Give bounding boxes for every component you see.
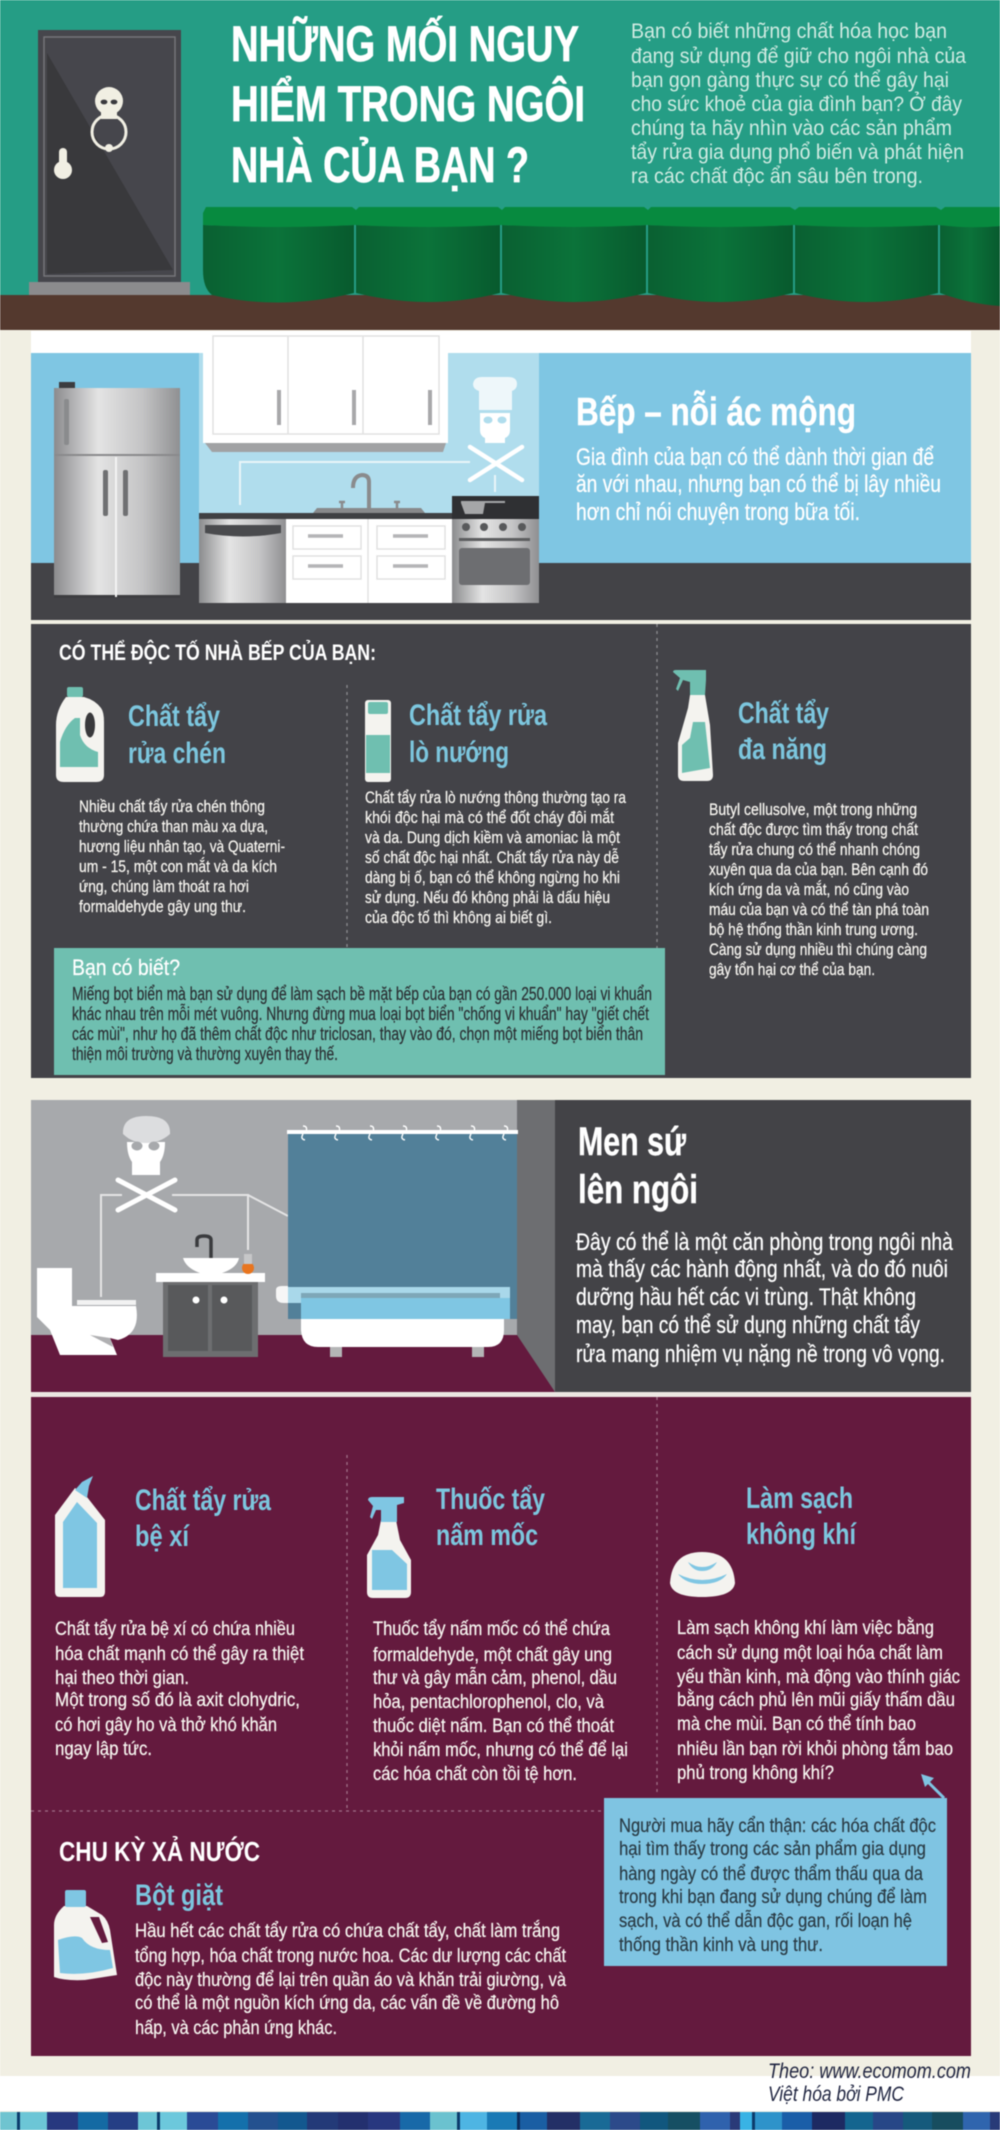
intro text xyxy=(631,20,966,188)
text: bathroom intro: may, bạn có thể sử dụng những chất tẩy xyxy=(576,1312,920,1339)
all-purpose title: Chất tẩy xyxy=(738,697,829,730)
icon: fridge xyxy=(54,382,180,598)
text: air freshener xyxy=(677,1617,960,1784)
callout: did you know: khác nhau trên mỗi mét vuông. Nhưng đừng mua loại bọt biển "chống vi khuẩn" hay "giết chết xyxy=(72,1003,649,1024)
toilet cleaner title xyxy=(135,1484,271,1553)
text: all-purpose: bộ hệ thống thần kinh trung ương. xyxy=(709,920,918,939)
text: mold spray: các hóa chất còn tồi tệ hơn. xyxy=(373,1764,577,1785)
credits: Theo: www.ecomom.com xyxy=(768,2060,971,2083)
callout: did you know xyxy=(54,948,665,1075)
text: dish soap: formaldehyde gây ung thư. xyxy=(79,897,246,916)
icon: air freshener xyxy=(670,1552,735,1597)
text: toilet cleaner: hóa chất mạnh có thể gây ra thiệt xyxy=(55,1644,305,1665)
text: air freshener: yếu thần kinh, mà động vào thính giác xyxy=(677,1667,960,1688)
text: oven cleaner: dàng bị ố, bạn có thể không ngừng ho khi xyxy=(365,868,620,887)
text: all-purpose: xuyên qua da của bạn. Bên cạnh đó xyxy=(709,860,928,879)
text: dish soap xyxy=(79,797,285,916)
text: oven cleaner: của độc tố thì không ai biết gì. xyxy=(365,908,552,927)
callout: buyer beware: trong khi bạn đang sử dụng chúng để làm xyxy=(619,1887,927,1908)
text: all-purpose: Butyl cellusolve, một trong những xyxy=(709,800,917,819)
text: air freshener: mà che mùi. Bạn có thể tính bao xyxy=(677,1714,916,1735)
panel: kitchen toxins xyxy=(31,624,971,1078)
icon: sink and faucet xyxy=(199,475,452,519)
text: mold spray: formaldehyde, một chất gây ung xyxy=(373,1645,612,1666)
oven cleaner title: lò nướng xyxy=(409,736,509,769)
text: air freshener: nhiêu lần bạn rời khỏi phòng tắm bao xyxy=(677,1738,953,1760)
intro text: đang sử dụng để giữ cho ngôi nhà của xyxy=(631,45,966,68)
callout: did you know: Miếng bọt biển mà bạn sử dụng để làm sạch bề mặt bếp của bạn có gần 250.000 loại vi khuẩn xyxy=(72,984,652,1004)
text: mold spray: Thuốc tẩy nấm mốc có thể chứa xyxy=(373,1619,610,1640)
stripe band xyxy=(0,2112,1000,2130)
icon: toilet cleaner xyxy=(55,1476,105,1597)
text: laundry: độc này thường để lại trên quần áo và khăn trải giường, và xyxy=(135,1970,566,1991)
credits: Việt hóa bởi PMC xyxy=(768,2083,905,2106)
text: all-purpose: Càng sử dụng nhiều thì chúng càng xyxy=(709,940,927,959)
oven cleaner title: Chất tẩy rửa xyxy=(409,699,547,732)
panel: bathroom toxins xyxy=(31,1392,971,2056)
text: all-purpose: tẩy rửa chung có thể nhanh chóng xyxy=(709,840,920,859)
air freshener title: Làm sạch xyxy=(746,1482,853,1515)
text: dish soap: hương liệu nhân tạo, và Quaterni- xyxy=(79,837,285,856)
title xyxy=(231,15,585,193)
text: oven cleaner: khói độc hại mà có thể đốt cháy đôi mắt xyxy=(365,808,614,827)
intro text: ra các chất độc ẩn sâu bên trong. xyxy=(631,165,923,188)
text: oven cleaner xyxy=(365,788,626,927)
intro text: Bạn có biết những chất hóa học bạn xyxy=(631,20,947,43)
callout: buyer beware: thống thần kinh và ung thư. xyxy=(619,1935,823,1956)
icon: detergent bottle xyxy=(54,1890,117,1980)
heading: bathroom xyxy=(578,1120,698,1212)
callout: did you know: các mùi", như họ đã thêm chất độc như triclosan, thay vào đó, chọn một miếng bọt biển thân xyxy=(72,1024,643,1044)
text: mold spray: thuốc diệt nấm. Bạn có thể thoát xyxy=(373,1716,615,1737)
footer white band xyxy=(0,2076,1000,2111)
text: air freshener: phủ trong không khí? xyxy=(677,1763,834,1784)
dish soap title xyxy=(128,700,226,770)
callout: buyer beware: Người mua hãy cẩn thận: các hóa chất độc xyxy=(619,1816,936,1837)
text: oven cleaner: sử dụng. Nếu đó không phải là dấu hiệu xyxy=(365,888,610,907)
icon: vanity sink xyxy=(156,1236,265,1357)
all-purpose title: đa năng xyxy=(738,733,827,766)
laundry title: Bột giặt xyxy=(135,1879,223,1912)
icon: shower curtain xyxy=(287,1126,518,1319)
mold title: nấm mốc xyxy=(436,1519,538,1552)
dish soap title: Chất tẩy xyxy=(128,700,220,733)
air freshener title: không khí xyxy=(746,1518,857,1551)
callout: buyer beware: hàng ngày có thể được thẩm thấu qua da xyxy=(619,1864,923,1885)
text: all-purpose: gây tổn hại cơ thể của bạn. xyxy=(709,960,875,979)
intro text: bạn gọn gàng thực sự có thể gây hại xyxy=(631,69,949,92)
heading: bathroom: Men sứ xyxy=(578,1120,686,1164)
text: air freshener: cách sử dụng một loại hóa chất làm xyxy=(677,1643,943,1664)
text: laundry: có thể là một nguồn kích ứng da, các vấn đề về đường hô xyxy=(135,1993,559,2014)
icon: stove xyxy=(452,496,539,603)
intro text: tẩy rửa gia dụng phổ biến và phát hiện xyxy=(631,141,964,164)
text: all-purpose: chất độc được tìm thấy trong chất xyxy=(709,820,918,839)
heading: bathroom: lên ngôi xyxy=(578,1168,698,1212)
text: all-purpose xyxy=(709,800,929,979)
text: oven cleaner: số chất độc hại nhất. Chất tẩy rửa này dễ xyxy=(365,848,619,867)
panel: kitchen scene xyxy=(31,331,971,620)
callout: did you know: thiện môi trường và thường xuyên thay thế. xyxy=(72,1044,338,1064)
text: laundry xyxy=(135,1920,567,2039)
header banner xyxy=(0,0,1000,330)
icon: dishwasher xyxy=(199,519,286,603)
icon: mold spray xyxy=(367,1497,411,1598)
mold title: Thuốc tẩy xyxy=(436,1483,545,1516)
text: oven cleaner: Chất tẩy rửa lò nướng thông thường tạo ra xyxy=(365,788,626,807)
mold title xyxy=(436,1483,545,1552)
text: toilet cleaner: Một trong số đó là axit clohydric, xyxy=(55,1690,300,1711)
panel: bathroom scene xyxy=(31,1100,971,1392)
icon: chef skull and crossbones xyxy=(240,377,522,505)
text: kitchen intro xyxy=(576,444,941,526)
toilet cleaner title: Chất tẩy rửa xyxy=(135,1484,271,1517)
text: toilet cleaner: hại theo thời gian. xyxy=(55,1668,189,1689)
text: bathroom intro: dưỡng hầu hết các vi trùng. Thật không xyxy=(576,1284,916,1311)
icon: skull door xyxy=(29,30,190,295)
text: toilet cleaner: có hơi gây ho và thở khó khăn xyxy=(55,1715,277,1736)
callout: buyer beware: hại tìm thấy trong các sản phẩm gia dụng xyxy=(619,1839,926,1860)
air freshener title xyxy=(746,1482,857,1551)
hedge xyxy=(203,207,1000,306)
icon: all-purpose spray xyxy=(673,670,713,781)
icon: toilet xyxy=(37,1268,137,1355)
toilet cleaner title: bệ xí xyxy=(135,1520,190,1553)
text: dish soap: um - 15, một con mắt và da kích xyxy=(79,857,277,876)
intro text: chúng ta hãy nhìn vào các sản phẩm xyxy=(631,117,952,140)
icon: hairnet skull and crossbones xyxy=(101,1116,367,1297)
text: mold spray: thư và gây mẫn cảm, phenol, dầu xyxy=(373,1667,617,1689)
text: mold spray xyxy=(373,1619,628,1785)
heading: flush cycle: CHU KỲ XẢ NƯỚC xyxy=(59,1835,260,1867)
title: NHÀ CỦA BẠN ? xyxy=(231,136,529,193)
text: mold spray: hỏa, pentachlorophenol, clo, và xyxy=(373,1692,604,1713)
icon: dish soap bottle xyxy=(56,687,104,782)
text: dish soap: ứng, chúng làm thoát ra hơi xyxy=(79,877,249,896)
callout: buyer beware: sạch, và có thể dẫn độc gan, rối loạn hệ xyxy=(619,1910,912,1932)
text: mold spray: khỏi nấm mốc, nhưng có thể để lại xyxy=(373,1740,628,1761)
credits xyxy=(768,2060,971,2106)
text: toilet cleaner: Chất tẩy rửa bệ xí có chứa nhiều xyxy=(55,1619,295,1640)
icon: wall cabinets xyxy=(203,331,448,452)
text: all-purpose: máu của bạn và có thể tàn phá toàn xyxy=(709,900,929,919)
title: HIỂM TRONG NGÔI xyxy=(231,75,585,132)
title: NHỮNG MỐI NGUY xyxy=(231,15,579,72)
text: kitchen intro: hơn chỉ nói chuyện trong bữa tối. xyxy=(576,499,860,526)
text: all-purpose: kích ứng da và mắt, nó cũng vào xyxy=(709,880,909,899)
text: bathroom intro xyxy=(576,1229,954,1368)
text: oven cleaner: và da. Dung dịch kiềm và amoniac là một xyxy=(365,828,620,847)
text: laundry: Hầu hết các chất tẩy rửa có chứa chất tẩy, chất làm trắng xyxy=(135,1920,560,1942)
text: air freshener: bằng cách phủ lên mũi giấy thấm dầu xyxy=(677,1689,955,1711)
heading: kitchen: Bếp – nỗi ác mộng xyxy=(576,390,856,434)
heading: kitchen toxins: CÓ THỂ ĐỘC TỐ NHÀ BẾP CỦA BẠN: xyxy=(59,639,376,665)
dish soap title: rửa chén xyxy=(128,737,226,770)
icon: oven cleaner can xyxy=(365,700,391,782)
intro text: cho sức khoẻ của gia đình bạn? Ở đây xyxy=(631,92,962,116)
all-purpose title xyxy=(738,697,829,766)
icon: lower cabinets xyxy=(286,519,452,603)
floor xyxy=(0,295,1000,330)
text: toilet cleaner: ngay lập tức. xyxy=(55,1739,152,1760)
text: dish soap: thường chứa than màu xa dựa, xyxy=(79,817,268,836)
text: air freshener: Làm sạch không khí làm việc bằng xyxy=(677,1617,934,1639)
text: laundry: tổng hợp, hóa chất trong nước hoa. Các dư lượng các chất xyxy=(135,1946,567,1967)
callout: did you know: Bạn có biết? xyxy=(72,955,180,980)
arrow xyxy=(921,1774,944,1798)
callout: buyer beware xyxy=(604,1798,947,1966)
text: dish soap: Nhiều chất tẩy rửa chén thông xyxy=(79,797,265,816)
text: toilet cleaner xyxy=(55,1619,305,1760)
text: laundry: hấp, và các phản ứng khác. xyxy=(135,2018,337,2039)
oven cleaner title xyxy=(409,699,547,769)
icon: bathtub xyxy=(276,1286,510,1357)
